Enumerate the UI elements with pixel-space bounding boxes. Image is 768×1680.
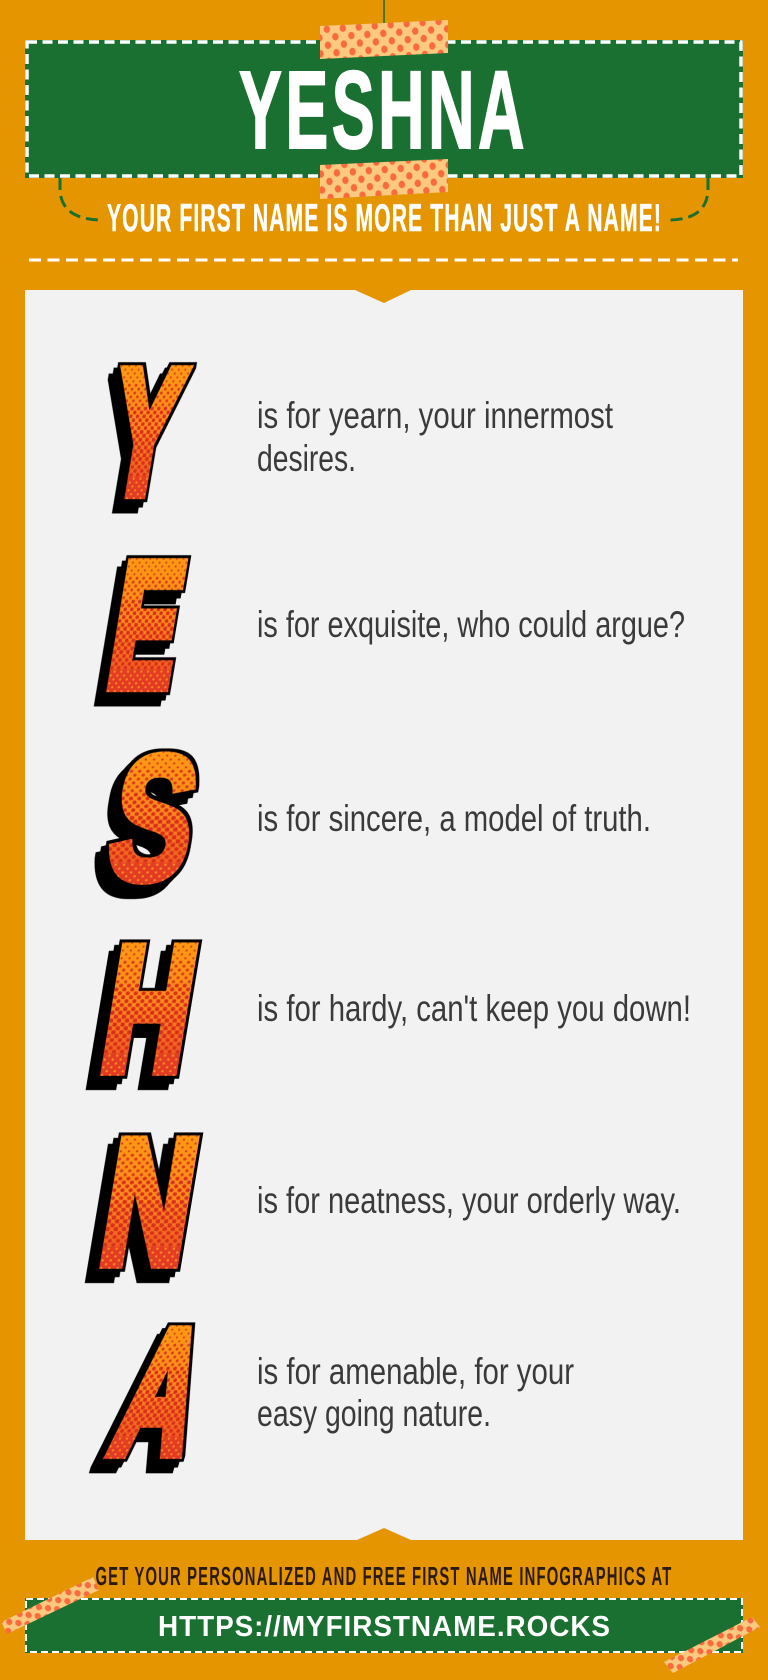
letter E: E <box>98 526 196 724</box>
row text Y <box>257 395 614 479</box>
tape: banner bottom <box>320 159 448 199</box>
title banner <box>25 40 743 178</box>
title: name: YESHNA <box>239 49 528 172</box>
row text A <box>257 1351 574 1434</box>
letter H: H <box>91 911 208 1109</box>
dashed connector: right <box>668 178 708 220</box>
letter A: A <box>96 1293 227 1491</box>
row text Y: is for yearn, your innermost <box>257 395 614 436</box>
footer url: HTTPS://MYFIRSTNAME.ROCKS <box>158 1611 611 1643</box>
tape: footer right <box>664 1617 760 1673</box>
row text S: is for sincere, a model of truth. <box>257 798 651 839</box>
dashed connector: left <box>60 178 103 220</box>
letter S: S <box>97 719 211 917</box>
letter N: N <box>90 1104 209 1301</box>
row text A: easy going nature. <box>257 1393 491 1434</box>
row text A: is for amenable, for your <box>257 1351 574 1392</box>
dashed divider <box>29 258 738 262</box>
white main panel <box>25 290 743 1540</box>
row text Y: desires. <box>257 438 356 479</box>
footer banner <box>25 1598 743 1653</box>
letter Y: Y <box>97 333 195 531</box>
hanging green line <box>383 0 385 26</box>
tape: banner top <box>320 20 448 59</box>
tape: footer left <box>2 1577 99 1634</box>
